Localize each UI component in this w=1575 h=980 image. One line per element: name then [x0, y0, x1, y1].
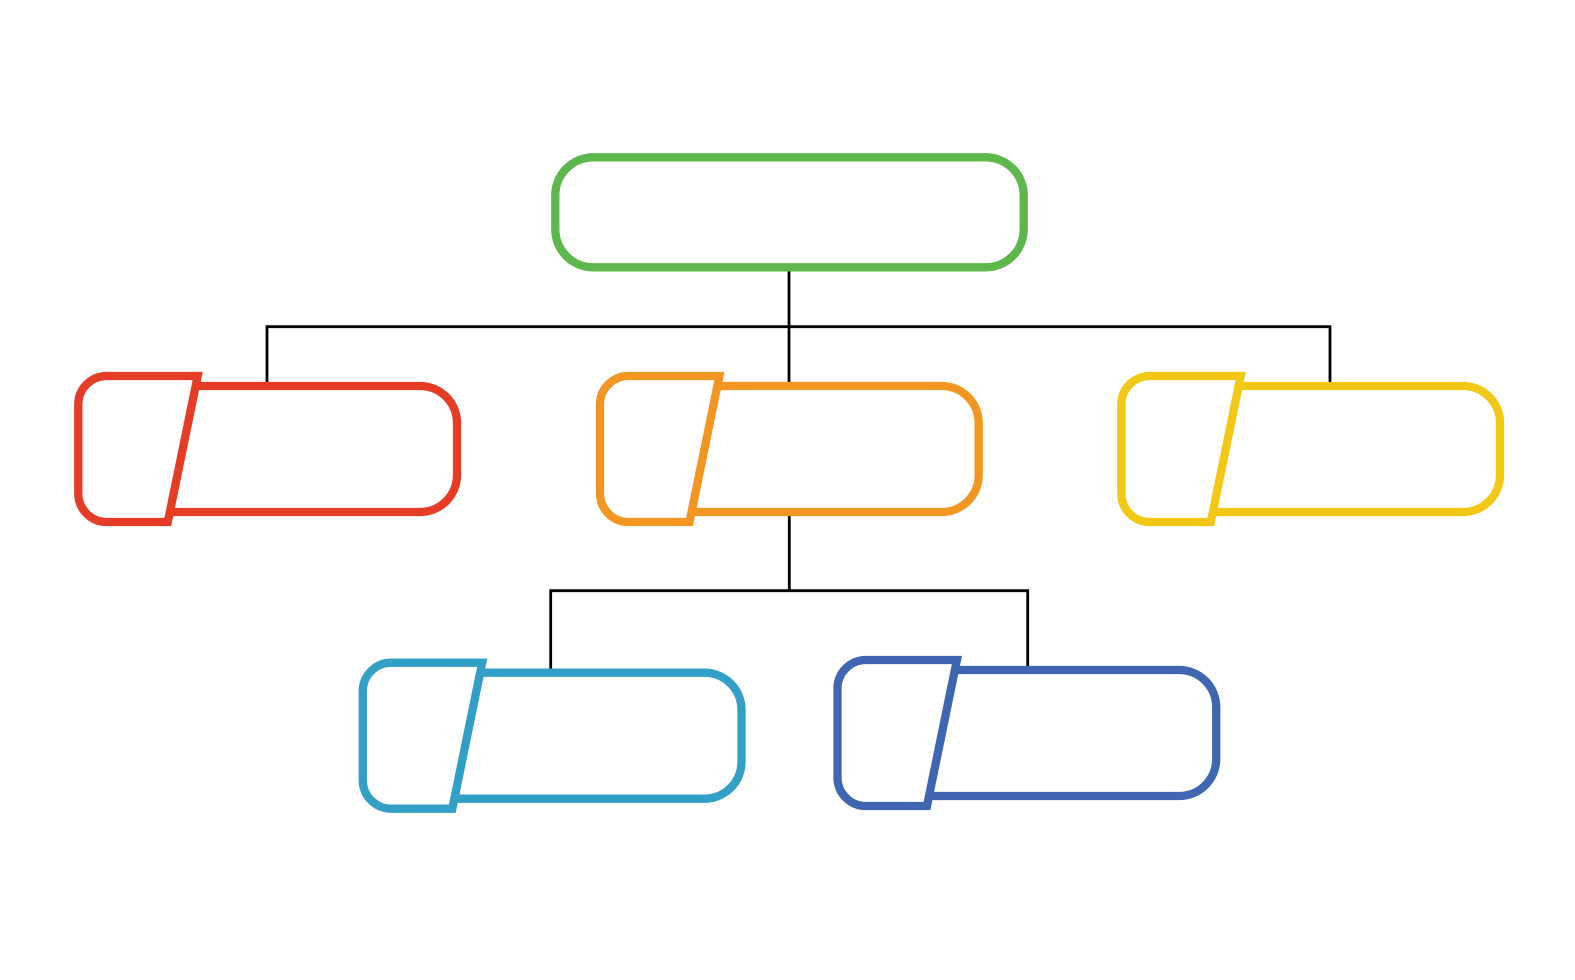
node: teal [363, 663, 742, 809]
node: orange [600, 376, 979, 522]
node: blue [838, 660, 1216, 806]
connector lines: second level [551, 516, 1028, 669]
root box: green [555, 157, 1024, 267]
node: red [78, 376, 457, 522]
node: yellow [1121, 376, 1500, 522]
connector lines: top level [267, 271, 1330, 382]
